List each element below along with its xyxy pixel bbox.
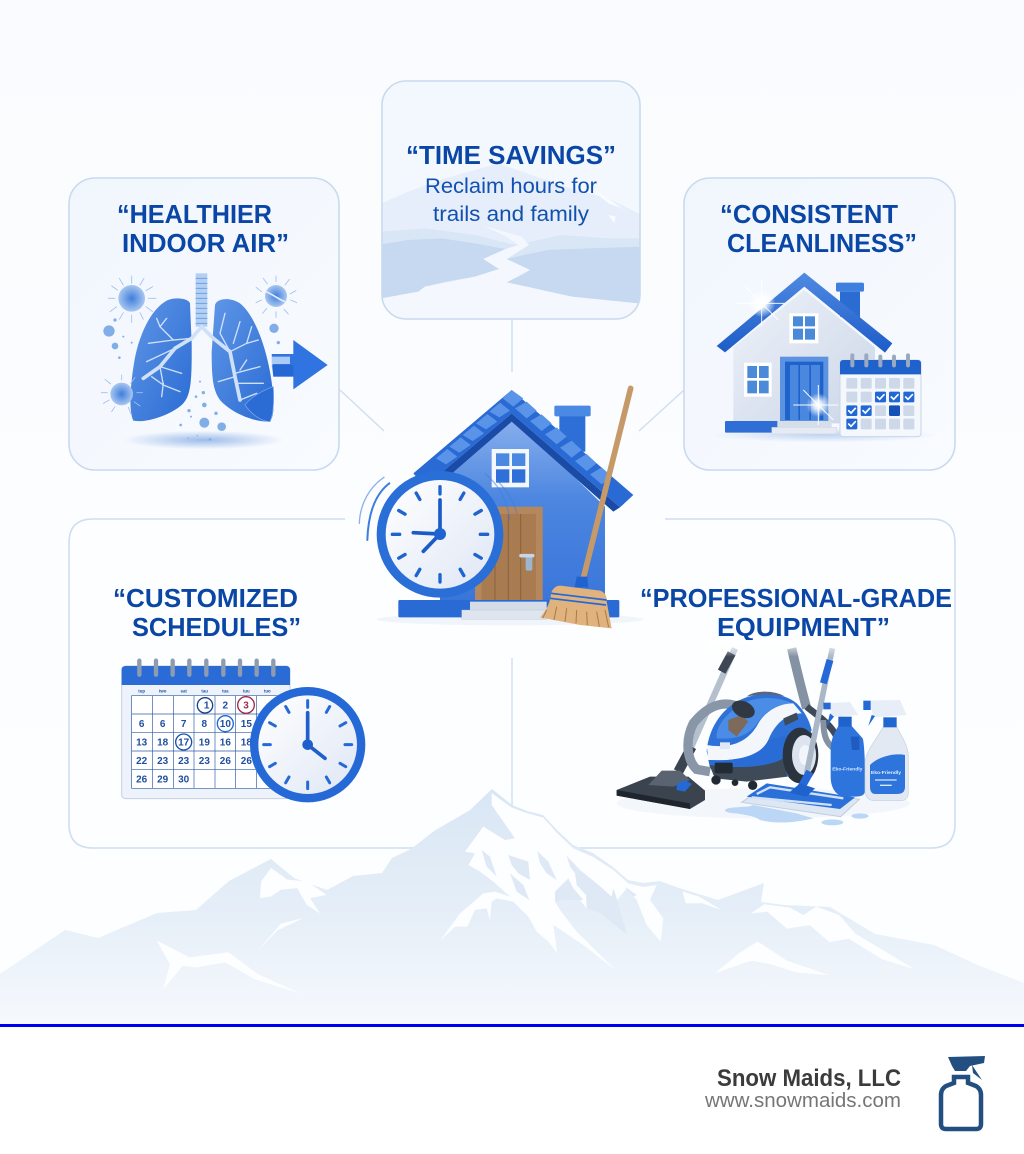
heading: consistent cleanliness: [720, 199, 917, 258]
heading: customized schedules: [113, 583, 301, 642]
icon: calendar and clock: 15: [241, 719, 252, 730]
icon: calendar and clock: tup: [138, 688, 145, 693]
icon: calendar and clock: tau: [201, 688, 208, 693]
icon: vacuum, mop and spray bottles: Eko-Friendly: [871, 770, 901, 776]
text: reclaim hours: trails and family: [433, 203, 590, 226]
house roof: [413, 390, 633, 512]
connector lines: [340, 320, 684, 431]
house window: [492, 449, 529, 487]
icon: calendar and clock: 16: [220, 738, 231, 749]
icon: calendar and clock: 18: [241, 738, 252, 749]
icon: calendar and clock: tuo: [264, 688, 271, 693]
heading: customized schedules: SCHEDULES”: [132, 612, 301, 642]
vacuum body: [707, 692, 818, 790]
icon: calendar and clock: 13: [136, 738, 148, 749]
snow on main peak: [440, 793, 663, 971]
icon: calendar and clock: 3: [243, 701, 249, 712]
mountain backdrop: [0, 789, 1024, 1024]
panel: customized schedules and professional equipment frame: [69, 519, 955, 848]
icon: vacuum, mop and spray bottles: Eko-Friendly: [832, 767, 863, 773]
icon: calendar and clock: 26: [220, 756, 231, 767]
heading: professional-grade equipment: “PROFESSIONAL-GRADE: [640, 583, 952, 613]
icon: calendar and clock: 7: [181, 719, 187, 730]
panel: healthier indoor air: [69, 178, 339, 470]
heading: healthier indoor air: INDOOR AIR”: [122, 228, 289, 258]
icon: calendar and clock: 23: [157, 756, 169, 767]
icon: calendar and clock: sat: [181, 688, 187, 693]
house door: [475, 507, 543, 601]
icon: calendar and clock: 30: [178, 774, 190, 785]
broom: [540, 388, 631, 628]
footer divider: [0, 1024, 1024, 1027]
panel: time savings: [382, 81, 642, 320]
icon: calendar and clock: 18: [157, 738, 169, 749]
company name: Snow Maids, LLC: [717, 1065, 901, 1092]
snow on secondary peaks: [157, 868, 914, 993]
panel content: professional-grade equipment: [617, 583, 952, 825]
icon: vacuum, mop and spray bottles: [617, 640, 910, 825]
text: reclaim hours: Reclaim hours for: [425, 175, 597, 198]
house wall: [440, 417, 605, 602]
clock: [377, 471, 503, 598]
icon: calendar and clock: tua: [222, 688, 229, 693]
website: www.snowmaids.com: [704, 1090, 901, 1112]
icon: calendar and clock: tuu: [243, 688, 250, 693]
icon: lungs with particles and arrow: [101, 273, 328, 449]
motion arcs: [359, 473, 517, 540]
panel: consistent cleanliness: [684, 178, 955, 470]
icon: calendar and clock: 6: [160, 719, 166, 730]
icon: calendar and clock: 2: [223, 701, 229, 712]
heading: professional-grade equipment: EQUIPMENT”: [717, 612, 890, 642]
footer brand: [704, 1056, 985, 1129]
heading: healthier indoor air: “HEALTHIER: [117, 199, 272, 229]
icon: calendar and clock: [122, 661, 365, 802]
scene: mountain and winding trail: [382, 164, 640, 304]
icon: calendar and clock: 1: [204, 701, 210, 712]
icon: calendar and clock: 17: [178, 738, 190, 749]
icon: calendar and clock: 26: [136, 774, 148, 785]
heading: time savings: “TIME SAVINGS”: [406, 140, 616, 170]
text: reclaim hours: [425, 175, 597, 226]
heading: healthier indoor air: [117, 199, 289, 258]
icon: spray bottle: [941, 1056, 985, 1129]
icon: calendar and clock: 8: [202, 719, 208, 730]
icon: calendar and clock: 29: [157, 774, 169, 785]
house base and steps: [398, 600, 619, 619]
icon: calendar and clock: 26: [241, 756, 252, 767]
icon: calendar and clock: 22: [136, 756, 148, 767]
centre illustration: house, clock and broom: [359, 388, 643, 628]
icon: calendar and clock: 10: [220, 719, 231, 730]
heading: customized schedules: “CUSTOMIZED: [113, 583, 298, 613]
icon: calendar and clock: 6: [139, 719, 145, 730]
icon: clean house with calendar: [710, 273, 937, 442]
heading: professional-grade equipment: [640, 583, 952, 642]
panel content: customized schedules: [113, 583, 365, 802]
icon: calendar and clock: 19: [199, 738, 210, 749]
icon: calendar and clock: 23: [178, 756, 190, 767]
icon: calendar and clock: 23: [199, 756, 210, 767]
heading: consistent cleanliness: “CONSISTENT: [720, 199, 898, 229]
heading: consistent cleanliness: CLEANLINESS”: [727, 228, 917, 258]
icon: calendar and clock: two: [159, 688, 167, 693]
house chimney: [554, 406, 591, 452]
